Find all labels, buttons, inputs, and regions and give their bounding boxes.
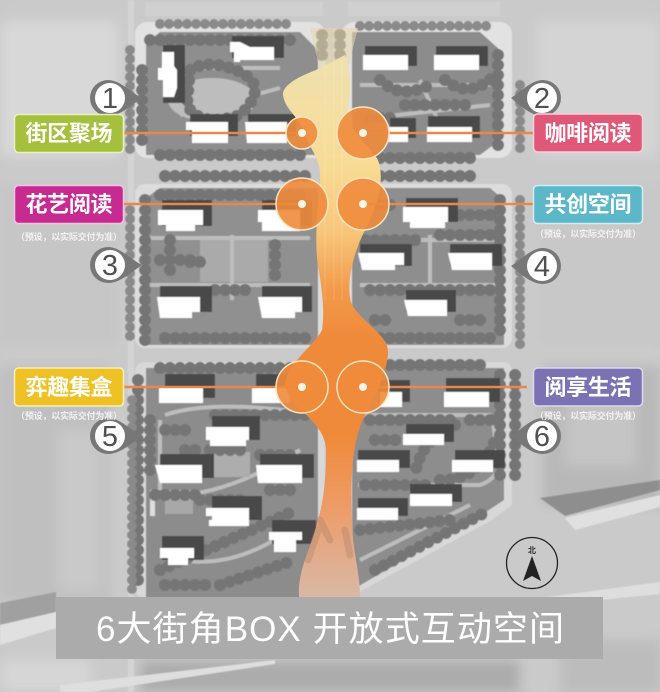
pin 4: 4	[534, 251, 550, 283]
label: 花艺阅读: 花艺阅读	[26, 192, 112, 217]
white buildings	[155, 42, 493, 565]
label: 咖啡阅读: 咖啡阅读	[544, 121, 632, 146]
pin 5	[90, 418, 143, 454]
title banner	[56, 597, 603, 659]
label: 街区聚场	[14, 114, 124, 152]
note under 阅享生活: （预设，以实际交付为准）	[535, 410, 641, 421]
pin 2	[511, 80, 561, 116]
pin 5: 5	[102, 421, 118, 453]
pin 3: 3	[102, 250, 118, 282]
label: 共创空间: 共创空间	[544, 192, 632, 217]
central orange ribbon	[283, 28, 388, 597]
label: 弈趣集盒	[14, 368, 124, 406]
label: 阅享生活	[534, 368, 642, 406]
block outlines	[135, 22, 325, 158]
label: 阅享生活: 阅享生活	[544, 375, 632, 400]
note under 花艺阅读: （预设，以实际交付为准）	[16, 231, 122, 242]
label: 共创空间	[534, 186, 642, 224]
pin 1	[90, 80, 142, 116]
label: 花艺阅读	[14, 186, 124, 224]
icon: north compass: 北	[528, 545, 536, 555]
tree rows	[130, 24, 520, 590]
pin 3	[90, 247, 142, 283]
paths	[168, 78, 256, 122]
note under 共创空间: （预设，以实际交付为准）	[535, 228, 641, 239]
label: 弈趣集盒: 弈趣集盒	[26, 375, 112, 400]
icon: north compass	[506, 538, 558, 588]
connector lines	[124, 133, 533, 387]
pin 2: 2	[534, 83, 550, 115]
pin 6: 6	[534, 421, 550, 453]
title banner: 6大街角BOX 开放式互动空间	[96, 610, 564, 649]
pin 4	[511, 248, 561, 284]
pin 1: 1	[102, 83, 118, 115]
focus circles	[276, 107, 389, 413]
label: 街区聚场: 街区聚场	[26, 121, 112, 146]
label: 咖啡阅读	[534, 114, 642, 152]
note under 弈趣集盒: （预设，以实际交付为准）	[16, 410, 122, 421]
pin 6	[511, 418, 561, 454]
building shadows	[160, 36, 505, 560]
